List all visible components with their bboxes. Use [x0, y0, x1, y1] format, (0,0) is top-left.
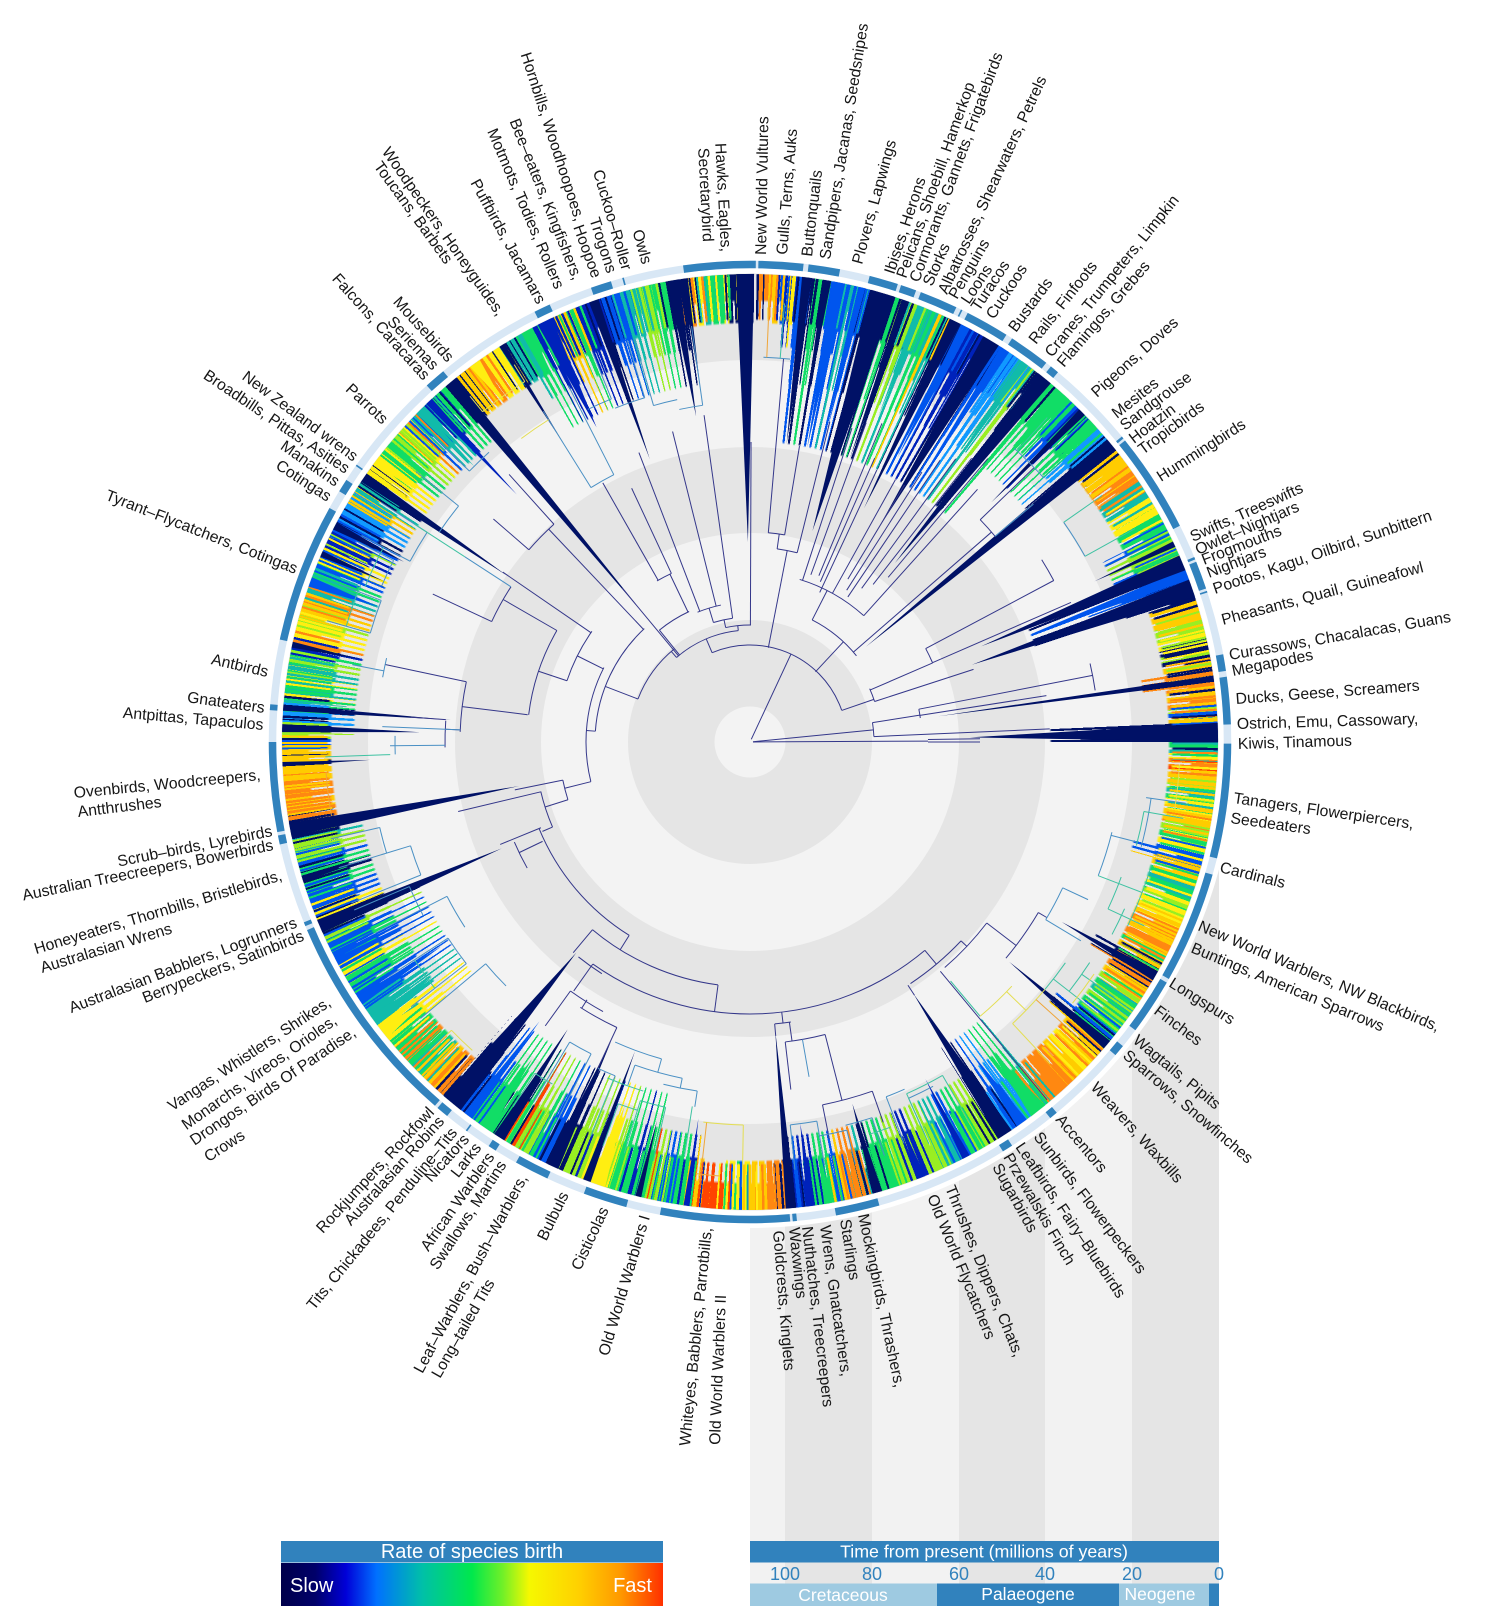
label: toucans: Toucans, Barbets [370, 159, 456, 267]
label: berrypeckers: Berrypeckers, Satinbirds [140, 928, 307, 1007]
label: tropicbirds: Tropicbirds [1135, 398, 1208, 458]
label: sugarbirds: Sugarbirds [989, 1161, 1040, 1236]
teal and green branches near the tips [189, 181, 1311, 1303]
label: nuthatches: Nuthatches, Treecreepers [798, 1225, 836, 1408]
label: megapodes: Megapodes [1230, 647, 1315, 680]
label: nightjars: Nightjars [1204, 544, 1269, 582]
label: pigeons: Pigeons, Doves [1088, 314, 1182, 401]
label: antpittas: Antpittas, Tapaculos [122, 705, 264, 734]
label: old world flycatchers: Old World Flycatchers [923, 1192, 998, 1342]
label: cuckoos: Cuckoos [983, 261, 1031, 322]
label: new zealand wrens: New Zealand wrens [239, 368, 361, 465]
species tips: mid-depth streaks [282, 276, 1214, 1208]
label: gulls: Gulls, Terns, Auks [774, 128, 801, 255]
root and deep backbone branches [276, 268, 1224, 1216]
label: wagtails: Wagtails, Pipits [1129, 1032, 1223, 1113]
label: mousebirds: Mousebirds [389, 294, 457, 366]
label: hoatzin: Hoatzin [1126, 401, 1179, 447]
phylogenetic tree [152, 144, 1348, 1340]
species tips: dense rim of coloured lineages [282, 274, 1218, 1210]
label: australasian wrens: Australasian Wrens [38, 921, 174, 977]
label: secretarybird: Secretarybird [694, 147, 716, 242]
label: puffbirds: Puffbirds, Jacamars [467, 177, 548, 307]
label: falcons: Falcons, Caracaras [328, 271, 433, 384]
blue and cyan mid-depth branches [192, 184, 1308, 1300]
label: ratites [1237, 711, 1418, 753]
label: ratites: Kiwis, Tinamous [1238, 733, 1352, 753]
label: old world warblers ii: Old World Warblers II [707, 1294, 730, 1445]
label: albatrosses: Albatrosses, Shearwaters, Petrels [935, 73, 1050, 297]
label: cardinals: Cardinals [1218, 859, 1287, 892]
label: crows: Crows [201, 1127, 248, 1166]
label: accentors: Accentors [1052, 1112, 1110, 1176]
label: cisticolas: Cisticolas [569, 1204, 613, 1273]
legend: geological time scale: 40 [1035, 1564, 1055, 1584]
label: curassows: Curassows, Chacalacas, Guans [1228, 609, 1452, 664]
label: antthrushes: Antthrushes [77, 794, 163, 821]
label: sunbirds: Sunbirds, Flowerpeckers [1030, 1129, 1149, 1277]
legend: geological time scale: Cretaceous [798, 1585, 888, 1605]
legend: geological time scale: 100 [770, 1564, 800, 1584]
label: goldcrests: Goldcrests, Kinglets [769, 1230, 797, 1371]
legend: geological time scale: Palaeogene [981, 1584, 1075, 1604]
label: buntings: Buntings, American Sparrows [1188, 940, 1386, 1035]
label: ibises: Ibises, Herons [882, 175, 930, 276]
label: tanagers: Seedeaters [1229, 810, 1312, 838]
label: tyrant-flycatchers: Tyrant–Flycatchers, Cotingas [103, 487, 300, 578]
label: woodpeckers: Woodpeckers, Honeyguides, [378, 144, 508, 319]
label: swifts: Swifts, Treeswifts [1188, 480, 1306, 546]
label: cuckoo-roller: Cuckoo–Roller [589, 168, 634, 272]
label: tits: Tits, Chickadees, Penduline–Tits [304, 1125, 461, 1313]
label: frogmouths: Frogmouths [1199, 523, 1284, 569]
label: pootos: Pootos, Kagu, Oilbird, Sunbittern [1211, 508, 1434, 598]
legend: rate of species birth: Rate of species birth [381, 1541, 563, 1563]
label: przewalskis finch: Przewalskis Finch [1000, 1150, 1078, 1268]
clade ring around the tree [76, 68, 1424, 1416]
legend: geological time scale: Neogene [1124, 1584, 1196, 1604]
label: ducks: Ducks, Geese, Screamers [1235, 678, 1420, 708]
label: old world warblers i: Old World Warblers I [596, 1213, 654, 1358]
label: loons: Loons [958, 262, 996, 307]
label: leaf-warblers: Leaf–Warblers, Bush–Warblers, [411, 1172, 532, 1376]
label: sandgrouse: Sandgrouse [1117, 369, 1195, 434]
species tips: fine mixed lines B [282, 274, 1218, 1210]
label: weavers: Weavers, Waxbills [1087, 1079, 1186, 1187]
label: pheasants: Pheasants, Quail, Guineafowl [1220, 559, 1425, 629]
label: new world warblers: New World Warblers, NW Blackbirds, [1195, 918, 1442, 1036]
label: cotingas: Cotingas [273, 457, 334, 505]
label: tanagers: Tanagers, Flowerpiercers, [1232, 790, 1415, 833]
species tips: deepest sparse streaks [782, 279, 1170, 742]
label: hornbills and hoopoe: Hoopoe [569, 223, 604, 281]
label: bustards: Bustards [1006, 275, 1056, 335]
label: parrots: Parrots [342, 381, 391, 428]
label: starlings: Starlings [836, 1218, 862, 1281]
label: hummingbirds: Hummingbirds [1154, 416, 1249, 485]
legend: geological time scale: 80 [862, 1564, 882, 1584]
species tips: deep streaks [327, 276, 1148, 1198]
label: broadbills: Broadbills, Pittas, Asities [200, 367, 352, 477]
label: monarchs: Monarchs, Vireos, Orioles, [179, 1012, 340, 1134]
label: gnateaters: Gnateaters [186, 689, 266, 717]
label: trogons: Trogons [585, 215, 619, 275]
label: pelicans: Pelicans, Shoebill, Hamerkop [894, 80, 979, 280]
label: treecreepers: Australian Treecreepers, Bowerbirds [21, 837, 275, 904]
label: rockjumpers: Rockjumpers, Rockfowl [313, 1104, 438, 1237]
label: long-tailed tits: Long–tailed Tits [429, 1276, 499, 1381]
legend: rate of species birth [281, 1541, 663, 1606]
label: buttonquails: Buttonquails [799, 169, 826, 257]
label: hornbills and hoopoe [517, 50, 604, 281]
label: australasian babblers: Australasian Babblers, Logrunners [67, 915, 300, 1017]
label: hornbills and hoopoe: Hornbills, Woodhoopoes, [517, 50, 587, 223]
label: waxwings: Waxwings [785, 1227, 809, 1300]
label: antbirds: Antbirds [210, 651, 270, 681]
tapered fast and slow lineage wedges [282, 274, 1218, 1209]
label: cranes: Cranes, Trumpeters, Limpkin [1042, 192, 1183, 361]
legend: rate of species birth: Fast [613, 1575, 652, 1597]
label: seriemas: Seriemas [384, 313, 442, 374]
label: nicators: Nicators [422, 1131, 473, 1186]
label: plovers: Plovers, Lapwings [849, 138, 900, 266]
label: thrushes: Thrushes, Dippers, Chats, [941, 1183, 1026, 1359]
label: owlet-nightjars: Owlet–Nightjars [1193, 499, 1302, 559]
label: penguins: Penguins [946, 236, 993, 302]
label: bulbuls: Bulbuls [535, 1189, 573, 1243]
label: storks: Storks [920, 241, 954, 289]
label: swallows: Swallows, Martins [427, 1158, 510, 1273]
label: turacos: Turacos [968, 258, 1014, 314]
legend: rate of species birth: Slow [290, 1575, 334, 1597]
yellow and orange branches near fast lineages [152, 144, 1348, 1340]
label: scrub-birds: Scrub–birds, Lyrebirds [116, 823, 274, 871]
label: vangas: Vangas, Whistlers, Shrikes, [165, 994, 334, 1115]
label: ratites: Ostrich, Emu, Cassowary, [1237, 711, 1418, 733]
label: mockingbirds: Mockingbirds, Thrashers, [854, 1212, 908, 1389]
label: sandpipers: Sandpipers, Jacanas, Seedsnipes [817, 22, 872, 261]
label: new world vultures: New World Vultures [753, 116, 772, 255]
label: australasian robins: Australasian Robins [341, 1113, 448, 1229]
label: drongos: Drongos, Birds Of Paradise, [187, 1024, 359, 1149]
label: bee-eaters: Bee–eaters, Kingfishers, [506, 116, 585, 282]
label: ovenbirds: Ovenbirds, Woodcreepers, [73, 767, 261, 802]
legend: geological time scale: 0 [1214, 1564, 1224, 1584]
label: manakins: Manakins [277, 438, 343, 490]
label: mesites: Mesites [1109, 375, 1162, 422]
legend: geological time scale: Time from present (millions of years) [840, 1542, 1128, 1562]
species tips: near-rim streaks [282, 274, 1218, 1210]
label: motmots: Motmots, Todies, Rollers [483, 126, 567, 292]
label: leafbirds: Leafbirds, Fairy–Bluebirds [1012, 1140, 1128, 1301]
label: larks: Larks [448, 1140, 485, 1181]
label: flamingos: Flamingos, Grebes [1054, 258, 1154, 371]
label: hawks: Hawks, Eagles, [711, 143, 734, 252]
label: honeyeaters: Honeyeaters, Thornbills, Bristlebirds, [32, 868, 284, 958]
label: finches: Finches [1151, 1003, 1205, 1050]
label: owls: Owls [628, 228, 655, 266]
label: wrens: Wrens, Gnatcatchers, [816, 1224, 854, 1378]
legend: geological time scale: 60 [949, 1564, 969, 1584]
label: longspurs: Longspurs [1166, 975, 1238, 1029]
label: sparrows: Sparrows, Snowfinches [1119, 1047, 1256, 1167]
label: african warblers: African Warblers [418, 1149, 498, 1254]
species tips: fine mixed lines A [282, 274, 1218, 1210]
legend: geological time scale: 20 [1122, 1564, 1142, 1584]
label: cormorants: Cormorants, Gannets, Frigatebirds [907, 50, 1007, 284]
label: whiteyes: Whiteyes, Babblers, Parrotbills, [677, 1227, 716, 1447]
label: rails: Rails, Finfoots [1026, 258, 1101, 347]
legend: geological time scale [750, 1541, 1224, 1606]
